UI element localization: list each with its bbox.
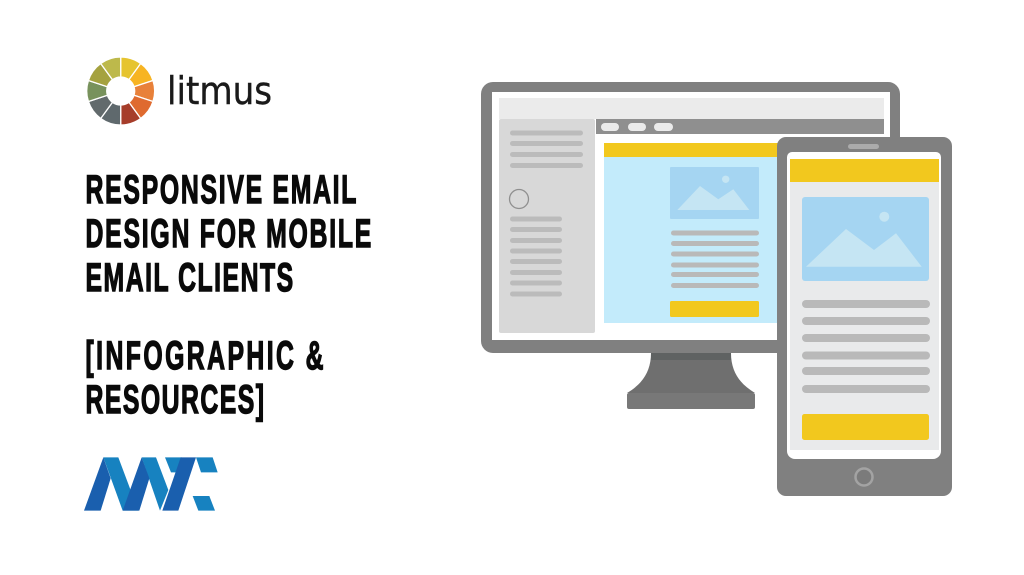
- monitor frame: [481, 82, 900, 353]
- subtitle: [86, 334, 324, 423]
- desktop monitor: [481, 82, 900, 409]
- title: EMAIL CLIENTS: [86, 256, 293, 301]
- icon: litmus colour wheel: [87, 57, 155, 125]
- litmus wordmark: litmus: [167, 69, 272, 113]
- browser toolbar: [596, 119, 884, 134]
- litmus logo: [87, 57, 272, 125]
- phone email header: [790, 159, 939, 182]
- phone hero image: [802, 197, 929, 281]
- sidebar: [499, 119, 595, 333]
- smartphone: [777, 137, 952, 496]
- title: [86, 168, 371, 301]
- phone speaker: [848, 144, 879, 149]
- phone body: [777, 137, 952, 496]
- phone text lines: [802, 300, 930, 393]
- title: RESPONSIVE EMAIL: [86, 168, 356, 213]
- browser top band: [499, 98, 884, 119]
- phone button: [802, 414, 929, 440]
- subtitle: RESOURCES]: [86, 378, 264, 423]
- MTC logo: [84, 457, 218, 511]
- monitor stand: [627, 353, 755, 409]
- title: DESIGN FOR MOBILE: [86, 212, 371, 257]
- subtitle: [INFOGRAPHIC &: [86, 334, 324, 379]
- monitor screen: [492, 92, 890, 340]
- desktop email: [604, 143, 790, 323]
- phone home button: [856, 468, 872, 486]
- phone email background: [790, 182, 939, 450]
- phone screen: [787, 152, 941, 459]
